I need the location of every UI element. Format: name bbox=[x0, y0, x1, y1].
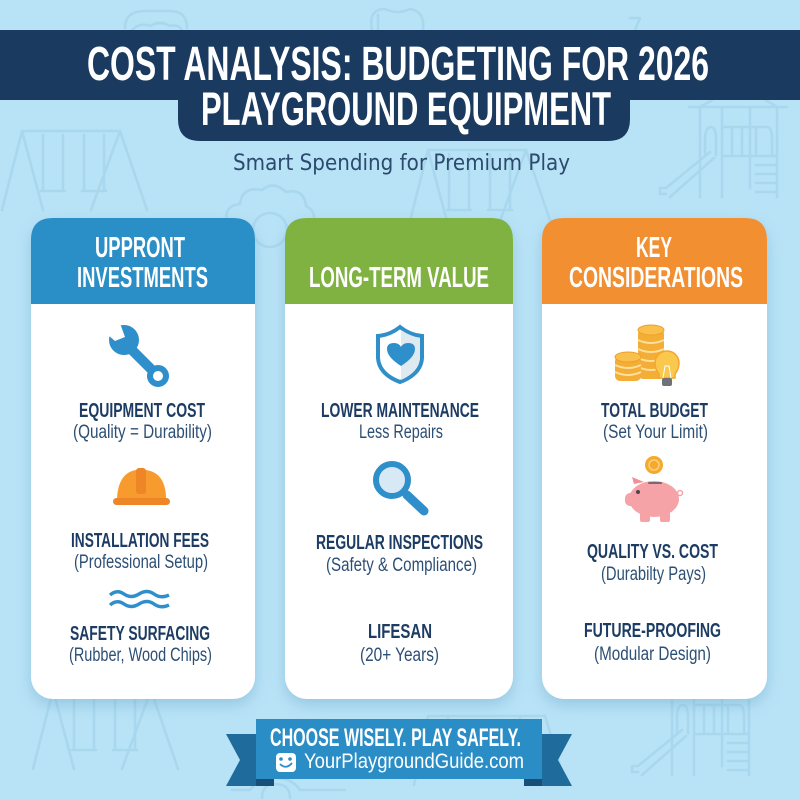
item: lifespan: LIFESAN bbox=[368, 621, 432, 643]
subtitle: Smart Spending for Premium Play bbox=[233, 151, 570, 176]
item: installation fees: (Professional Setup) bbox=[74, 552, 208, 573]
item: quality vs cost: QUALITY VS. COST bbox=[587, 541, 718, 563]
panel header: UPPRONT bbox=[95, 232, 185, 264]
panel header bbox=[542, 218, 767, 304]
item: lower maintenance: Less Repairs bbox=[359, 422, 443, 443]
panel header bbox=[285, 218, 513, 304]
footer ribbon bbox=[226, 719, 572, 786]
item: installation fees: INSTALLATION FEES bbox=[71, 530, 209, 552]
icon: wrench bbox=[102, 322, 166, 384]
icon: coins and light bulb bbox=[615, 325, 679, 386]
item: safety surfacing: SAFETY SURFACING bbox=[70, 623, 210, 645]
item: equipment cost: EQUIPMENT COST bbox=[79, 400, 205, 422]
panel header: INVESTMENTS bbox=[77, 262, 208, 294]
item: lower maintenance bbox=[321, 400, 479, 443]
item: total budget: TOTAL BUDGET bbox=[601, 400, 708, 422]
item: lifespan: (20+ Years) bbox=[360, 645, 439, 666]
item: safety surfacing bbox=[69, 623, 212, 666]
footer slogan: CHOOSE WISELY. PLAY SAFELY. bbox=[270, 724, 521, 752]
panel header: KEY bbox=[636, 232, 672, 264]
icon: magnifying glass bbox=[376, 464, 424, 511]
icon: smiley logo bbox=[276, 753, 296, 772]
item: future-proofing: (Modular Design) bbox=[594, 644, 711, 665]
icon: waves bbox=[110, 592, 169, 607]
icon: piggy bank with coin bbox=[625, 456, 682, 522]
item: equipment cost: (Quality = Durability) bbox=[73, 422, 212, 443]
item: total budget bbox=[601, 400, 708, 443]
item: equipment cost bbox=[73, 400, 212, 443]
panel: key considerations bbox=[542, 218, 767, 699]
icon: shield with heart bbox=[378, 327, 422, 382]
title bbox=[87, 38, 709, 135]
panel: upfront investments bbox=[31, 218, 255, 699]
title banner bbox=[0, 30, 800, 141]
item: future-proofing bbox=[584, 620, 721, 665]
item: quality vs cost bbox=[587, 541, 718, 585]
item: lower maintenance: LOWER MAINTENANCE bbox=[321, 400, 479, 422]
footer url: YourPlaygroundGuide.com bbox=[304, 750, 524, 773]
item: future-proofing: FUTURE-PROOFING bbox=[584, 620, 721, 642]
item: safety surfacing: (Rubber, Wood Chips) bbox=[69, 645, 212, 666]
item: total budget: (Set Your Limit) bbox=[603, 422, 708, 443]
item: regular inspections: REGULAR INSPECTIONS bbox=[316, 532, 483, 554]
item: quality vs cost: (Durabilty Pays) bbox=[601, 564, 706, 585]
item: regular inspections bbox=[316, 532, 483, 576]
panel header bbox=[31, 218, 255, 304]
item: installation fees bbox=[71, 530, 209, 573]
item: lifespan bbox=[360, 621, 439, 666]
panel: long-term value bbox=[285, 218, 513, 699]
icon: hard hat bbox=[113, 468, 170, 505]
panel header: LONG-TERM VALUE bbox=[309, 262, 489, 294]
item: regular inspections: (Safety & Compliance) bbox=[326, 555, 477, 576]
